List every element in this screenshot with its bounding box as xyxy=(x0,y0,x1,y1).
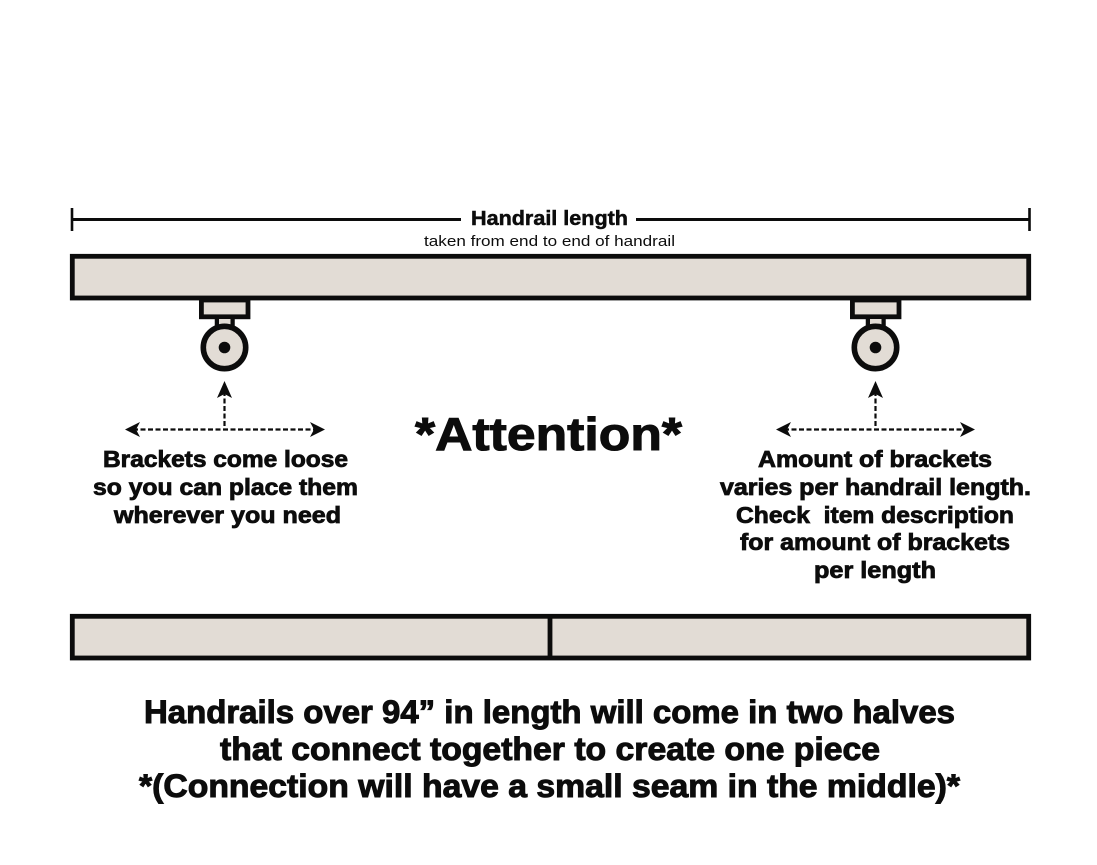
left note: brackets come loose: Brackets come loose xyxy=(103,446,348,472)
right note: amount of brackets: Amount of brackets xyxy=(758,446,992,472)
right note: amount of brackets xyxy=(720,446,1031,583)
bottom note: two halves: that connect together to create one piece xyxy=(220,731,880,767)
left note: brackets come loose xyxy=(93,446,358,528)
handrail bar xyxy=(72,256,1029,298)
two-piece handrail bar with seam xyxy=(72,616,1029,658)
left note: brackets come loose: so you can place them xyxy=(93,474,358,500)
bottom note: two halves xyxy=(139,694,961,804)
right note: amount of brackets: varies per handrail length. xyxy=(720,474,1031,500)
dimension line: handrail length xyxy=(72,208,1030,231)
left placement arrows xyxy=(125,381,325,437)
right note: amount of brackets: per length xyxy=(814,557,936,583)
heading: handrail length: Handrail length xyxy=(471,208,628,230)
caption: taken from end to end: taken from end to end of handrail xyxy=(424,234,675,250)
right placement arrows xyxy=(776,381,975,437)
right note: amount of brackets: Check item description xyxy=(736,502,1014,528)
attention heading: *Attention* xyxy=(415,408,682,460)
left note: brackets come loose: wherever you need xyxy=(113,502,341,528)
right bracket xyxy=(852,300,899,369)
bottom note: two halves: Handrails over 94” in length will come in two halves xyxy=(144,694,955,730)
bottom note: two halves: *(Connection will have a small seam in the middle)* xyxy=(139,768,961,804)
right note: amount of brackets: for amount of brackets xyxy=(740,529,1010,555)
left bracket xyxy=(201,300,248,369)
